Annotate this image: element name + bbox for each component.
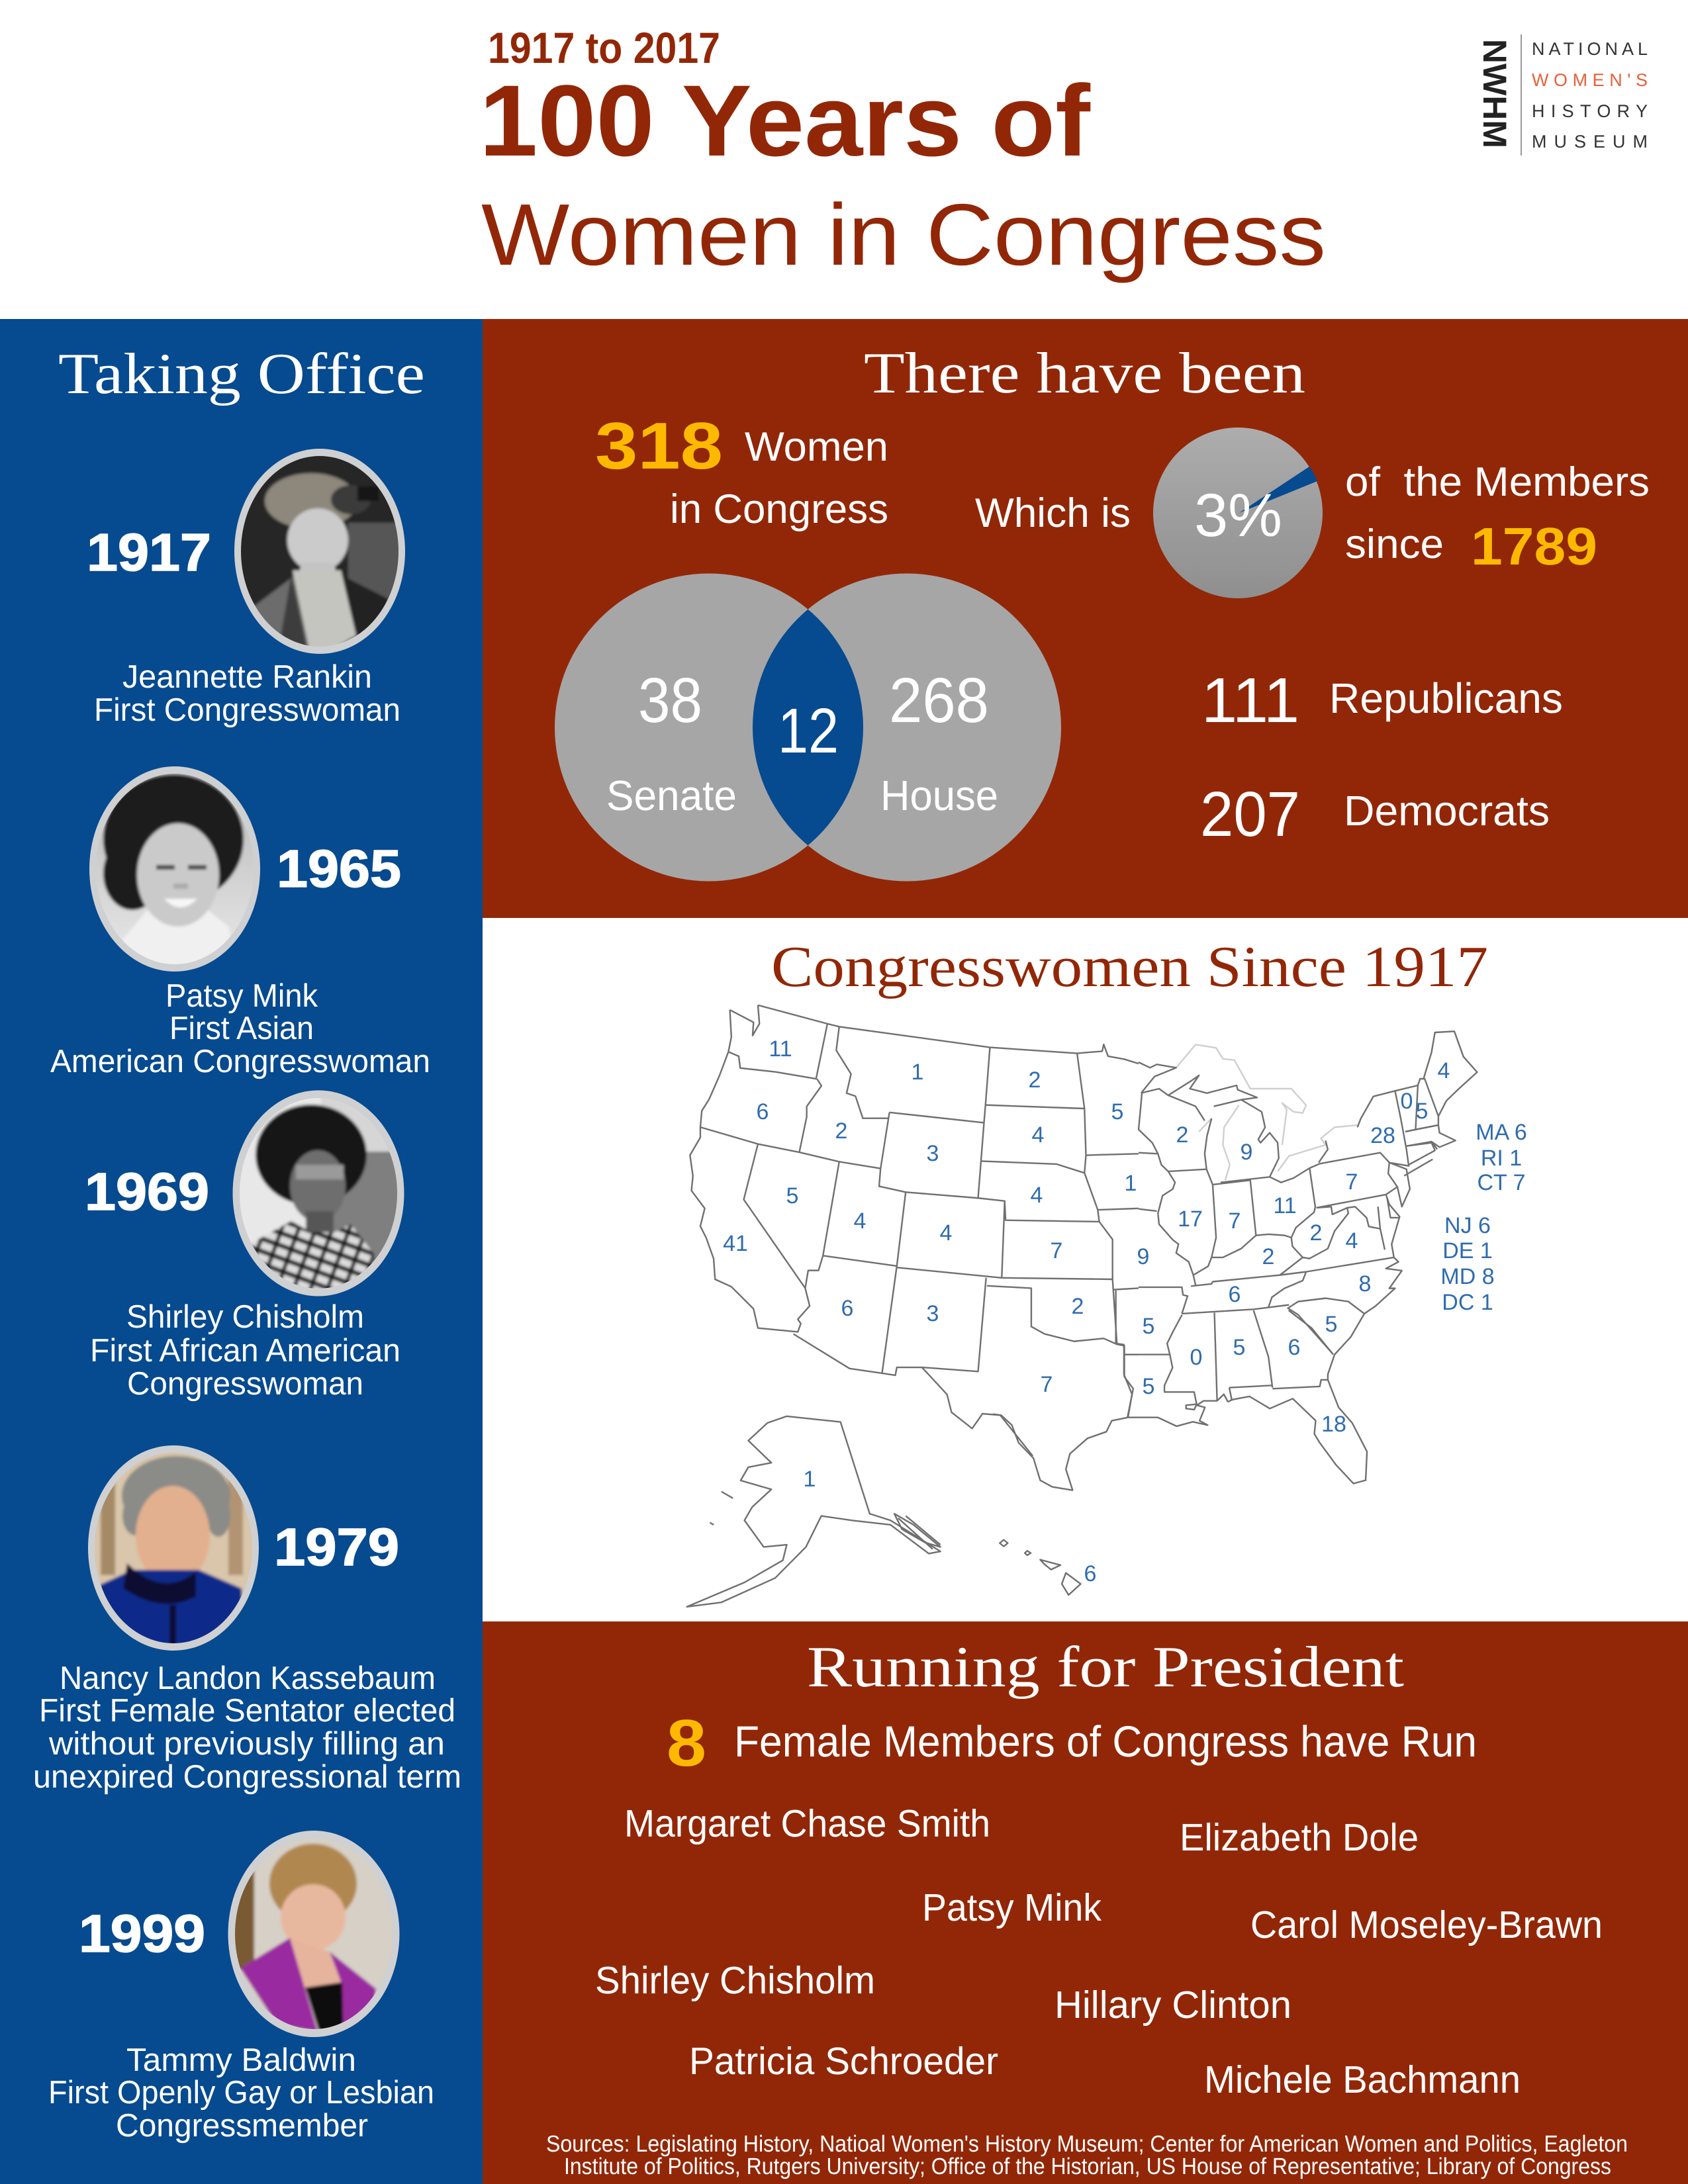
stat: of the members since 1789: 1789: [1471, 517, 1597, 576]
state counts: 41: [723, 1231, 748, 1256]
portrait: Jeannette Rankin: [232, 449, 410, 655]
state counts: 18: [1321, 1412, 1346, 1437]
state counts: 5: [786, 1183, 798, 1208]
heading: Congresswomen Since 1917: Congresswomen Since 1917: [771, 935, 1488, 999]
portrait: Patsy Mink: [86, 764, 265, 976]
caption: Tammy Baldwin: [126, 2042, 356, 2078]
venn diagram: Senate and House: [555, 573, 1061, 882]
heading: Taking Office: Taking Office: [58, 342, 425, 406]
state counts: 1: [1125, 1171, 1137, 1196]
state counts: 4: [1031, 1183, 1043, 1208]
panel: there have been: [483, 319, 1688, 918]
state counts: 5: [1416, 1099, 1428, 1124]
logo: National Women's History Museum: HISTORY: [1532, 101, 1648, 121]
map: US state outlines: [687, 1005, 1477, 1607]
state counts: 3: [927, 1301, 939, 1326]
panel: taking office timeline: [0, 319, 483, 2184]
portrait: Tammy Baldwin: [228, 1830, 400, 2038]
stat: 8 female members: Female Members of Congress have Run: [734, 1717, 1477, 1766]
caption: Shirley Chisholm: [126, 1299, 364, 1335]
state counts: 6: [1288, 1335, 1300, 1360]
panel: running for president: [483, 1621, 1688, 2184]
legend: small state counts: CT 7: [1477, 1170, 1526, 1195]
stat: of the members since 1789: of the Members: [1345, 459, 1650, 505]
sources: Institute of Politics, Rutgers University; Office of the Historian, US House of Representative; Library of Congress: [564, 2154, 1611, 2179]
map: Hawaii outline: [1000, 1540, 1081, 1595]
legend: small state counts: NJ 6: [1444, 1213, 1491, 1238]
state counts: 4: [1438, 1058, 1450, 1083]
venn diagram: Senate and House: Senate: [606, 772, 737, 819]
legend: small state counts: MD 8: [1440, 1264, 1495, 1289]
state counts: 6: [1084, 1561, 1096, 1586]
logo: National Women's History Museum: NATIONAL: [1532, 39, 1648, 59]
logo: National Women's History Museum: [1476, 34, 1648, 156]
state counts: 17: [1178, 1206, 1203, 1232]
state counts: 6: [841, 1296, 853, 1321]
state counts: 2: [1029, 1068, 1041, 1093]
stat: 318 women in Congress: in Congress: [670, 486, 888, 532]
state counts: 5: [1143, 1314, 1154, 1339]
entry: 1979 Nancy Landon Kassebaum: without previously filling an: [48, 1726, 445, 1762]
entry: 1917 Jeannette Rankin: [87, 449, 410, 728]
state counts: 2: [1262, 1244, 1274, 1269]
state counts: 11: [769, 1036, 792, 1062]
entry: 1965 Patsy Mink: American Congresswoman: [50, 1044, 430, 1079]
title: Women in Congress: Women in Congress: [481, 186, 1326, 283]
venn diagram: Senate and House: 12: [778, 696, 839, 766]
state counts: 1: [912, 1060, 923, 1085]
candidate names: Shirley Chisholm: [595, 1959, 875, 2002]
map: Alaska outline: [687, 1416, 941, 1607]
pie chart: 3%: [1153, 428, 1323, 598]
legend: small state counts: RI 1: [1481, 1146, 1522, 1171]
state counts: 6: [757, 1099, 769, 1124]
candidate names: Carol Moseley-Brawn: [1250, 1903, 1603, 1946]
state counts: 5: [1233, 1335, 1245, 1360]
stat: 111 Republicans: [1201, 665, 1563, 736]
state counts: 4: [1346, 1228, 1358, 1253]
entry: 1969 Shirley Chisholm: Congresswoman: [127, 1366, 363, 1402]
state counts: 4: [940, 1220, 952, 1246]
stat: 207 Democrats: 207: [1200, 779, 1300, 850]
state counts: 0: [1190, 1345, 1202, 1370]
venn diagram: Senate and House: House: [880, 772, 998, 819]
entry: 1999 Tammy Baldwin: 1999: [79, 1904, 205, 1963]
candidate names: Elizabeth Dole: [1180, 1816, 1419, 1859]
portrait: Shirley Chisholm: [232, 1089, 407, 1300]
entry: 1969 Shirley Chisholm: [85, 1089, 407, 1402]
state counts: 4: [854, 1208, 866, 1234]
stat: 318 women in Congress: 318: [595, 409, 723, 483]
title: 100 Years of: 100 Years of: [479, 64, 1091, 177]
entry: 1979 Nancy Landon Kassebaum: 1979: [274, 1518, 399, 1576]
state counts: 5: [1143, 1374, 1154, 1399]
state counts: 7: [1229, 1208, 1241, 1234]
candidate names: Michele Bachmann: [1204, 2058, 1521, 2101]
candidate names: Patricia Schroeder: [689, 2040, 998, 2083]
legend: small state counts: DC 1: [1442, 1290, 1493, 1315]
text: Which is: Which is: [975, 490, 1131, 536]
candidate names: Margaret Chase Smith: [624, 1802, 990, 1845]
entry: 1969 Shirley Chisholm: First African American: [90, 1333, 400, 1369]
candidate names: Hillary Clinton: [1055, 1983, 1291, 2026]
state counts: 9: [1137, 1244, 1149, 1269]
state counts: 2: [1176, 1122, 1188, 1148]
state counts: 9: [1241, 1140, 1252, 1165]
subtitle: 1917 to 2017: 1917 to 2017: [488, 23, 720, 72]
entry: 1965 Patsy Mink: 1965: [277, 839, 401, 898]
state counts: 0: [1401, 1089, 1413, 1114]
state counts: 6: [1229, 1282, 1241, 1307]
venn diagram: Senate and House: 38: [638, 665, 702, 736]
candidate names: [595, 1802, 1603, 2101]
logo: National Women's History Museum: NWHM: [1476, 39, 1513, 148]
stat: of the members since 1789: since: [1345, 522, 1444, 567]
state counts: 7: [1346, 1169, 1358, 1195]
heading: Running for President: Running for President: [807, 1635, 1404, 1700]
legend: small state counts: DE 1: [1442, 1238, 1493, 1263]
state counts: 28: [1370, 1123, 1395, 1148]
candidate names: Patsy Mink: [922, 1886, 1102, 1929]
state counts: 11: [1273, 1193, 1297, 1218]
state counts: 2: [1072, 1294, 1084, 1319]
stat: 207 Democrats: [1200, 779, 1550, 850]
entry: 1999 Tammy Baldwin: [48, 1830, 434, 2144]
stat: 8 female members: 8: [667, 1706, 706, 1780]
caption: Jeannette Rankin: [122, 659, 372, 695]
entry: 1917 Jeannette Rankin: First Congresswoman: [94, 692, 400, 728]
legend: small state counts: MA 6: [1476, 1120, 1527, 1145]
logo: National Women's History Museum: MUSEUM: [1532, 132, 1648, 152]
stat: 111 Republicans: Republicans: [1329, 674, 1563, 722]
state counts: [723, 1036, 1450, 1586]
state counts: 3: [927, 1141, 939, 1166]
state counts: 2: [835, 1118, 847, 1144]
portrait: Nancy Landon Kassebaum: [86, 1443, 261, 1655]
entry: 1999 Tammy Baldwin: First Openly Gay or Lesbian: [48, 2075, 434, 2111]
heading: There have been: There have been: [864, 341, 1305, 406]
caption: Patsy Mink: [165, 978, 318, 1014]
pie chart: 3%: 3%: [1194, 482, 1282, 549]
venn diagram: Senate and House: 268: [889, 665, 989, 736]
state counts: 5: [1111, 1099, 1123, 1124]
entry: 1979 Nancy Landon Kassebaum: [33, 1443, 461, 1795]
state counts: 4: [1032, 1122, 1044, 1148]
stat: 207 Democrats: Democrats: [1344, 787, 1550, 835]
stat: of the members since 1789: [1345, 459, 1650, 576]
entry: 1979 Nancy Landon Kassebaum: First Female Sentator elected: [39, 1693, 455, 1729]
entry: 1999 Tammy Baldwin: Congressmember: [116, 2108, 368, 2144]
entry: 1917 Jeannette Rankin: 1917: [87, 523, 211, 582]
legend: small state counts: [1440, 1120, 1527, 1315]
state counts: 7: [1051, 1238, 1062, 1263]
state counts: 7: [1041, 1372, 1053, 1397]
state counts: 1: [804, 1467, 816, 1492]
sources: [546, 2131, 1628, 2179]
stat: 318 women in Congress: [595, 409, 888, 532]
panel: congresswomen since 1917 map: [483, 918, 1688, 1621]
entry: 1979 Nancy Landon Kassebaum: unexpired Congressional term: [33, 1759, 461, 1795]
header: title block: [479, 23, 1326, 283]
entry: 1965 Patsy Mink: First Asian: [169, 1011, 314, 1046]
stat: 111 Republicans: 111: [1201, 665, 1299, 736]
state counts: 5: [1325, 1312, 1337, 1337]
stat: 8 female members: [667, 1706, 1477, 1780]
state counts: 2: [1310, 1220, 1322, 1246]
entry: 1969 Shirley Chisholm: 1969: [85, 1162, 209, 1221]
logo: National Women's History Museum: WOMEN'S: [1532, 70, 1648, 90]
caption: Nancy Landon Kassebaum: [60, 1661, 436, 1696]
state counts: 8: [1359, 1271, 1371, 1297]
entry: 1965 Patsy Mink: [50, 764, 430, 1079]
stat: 318 women in Congress: Women: [745, 424, 888, 470]
